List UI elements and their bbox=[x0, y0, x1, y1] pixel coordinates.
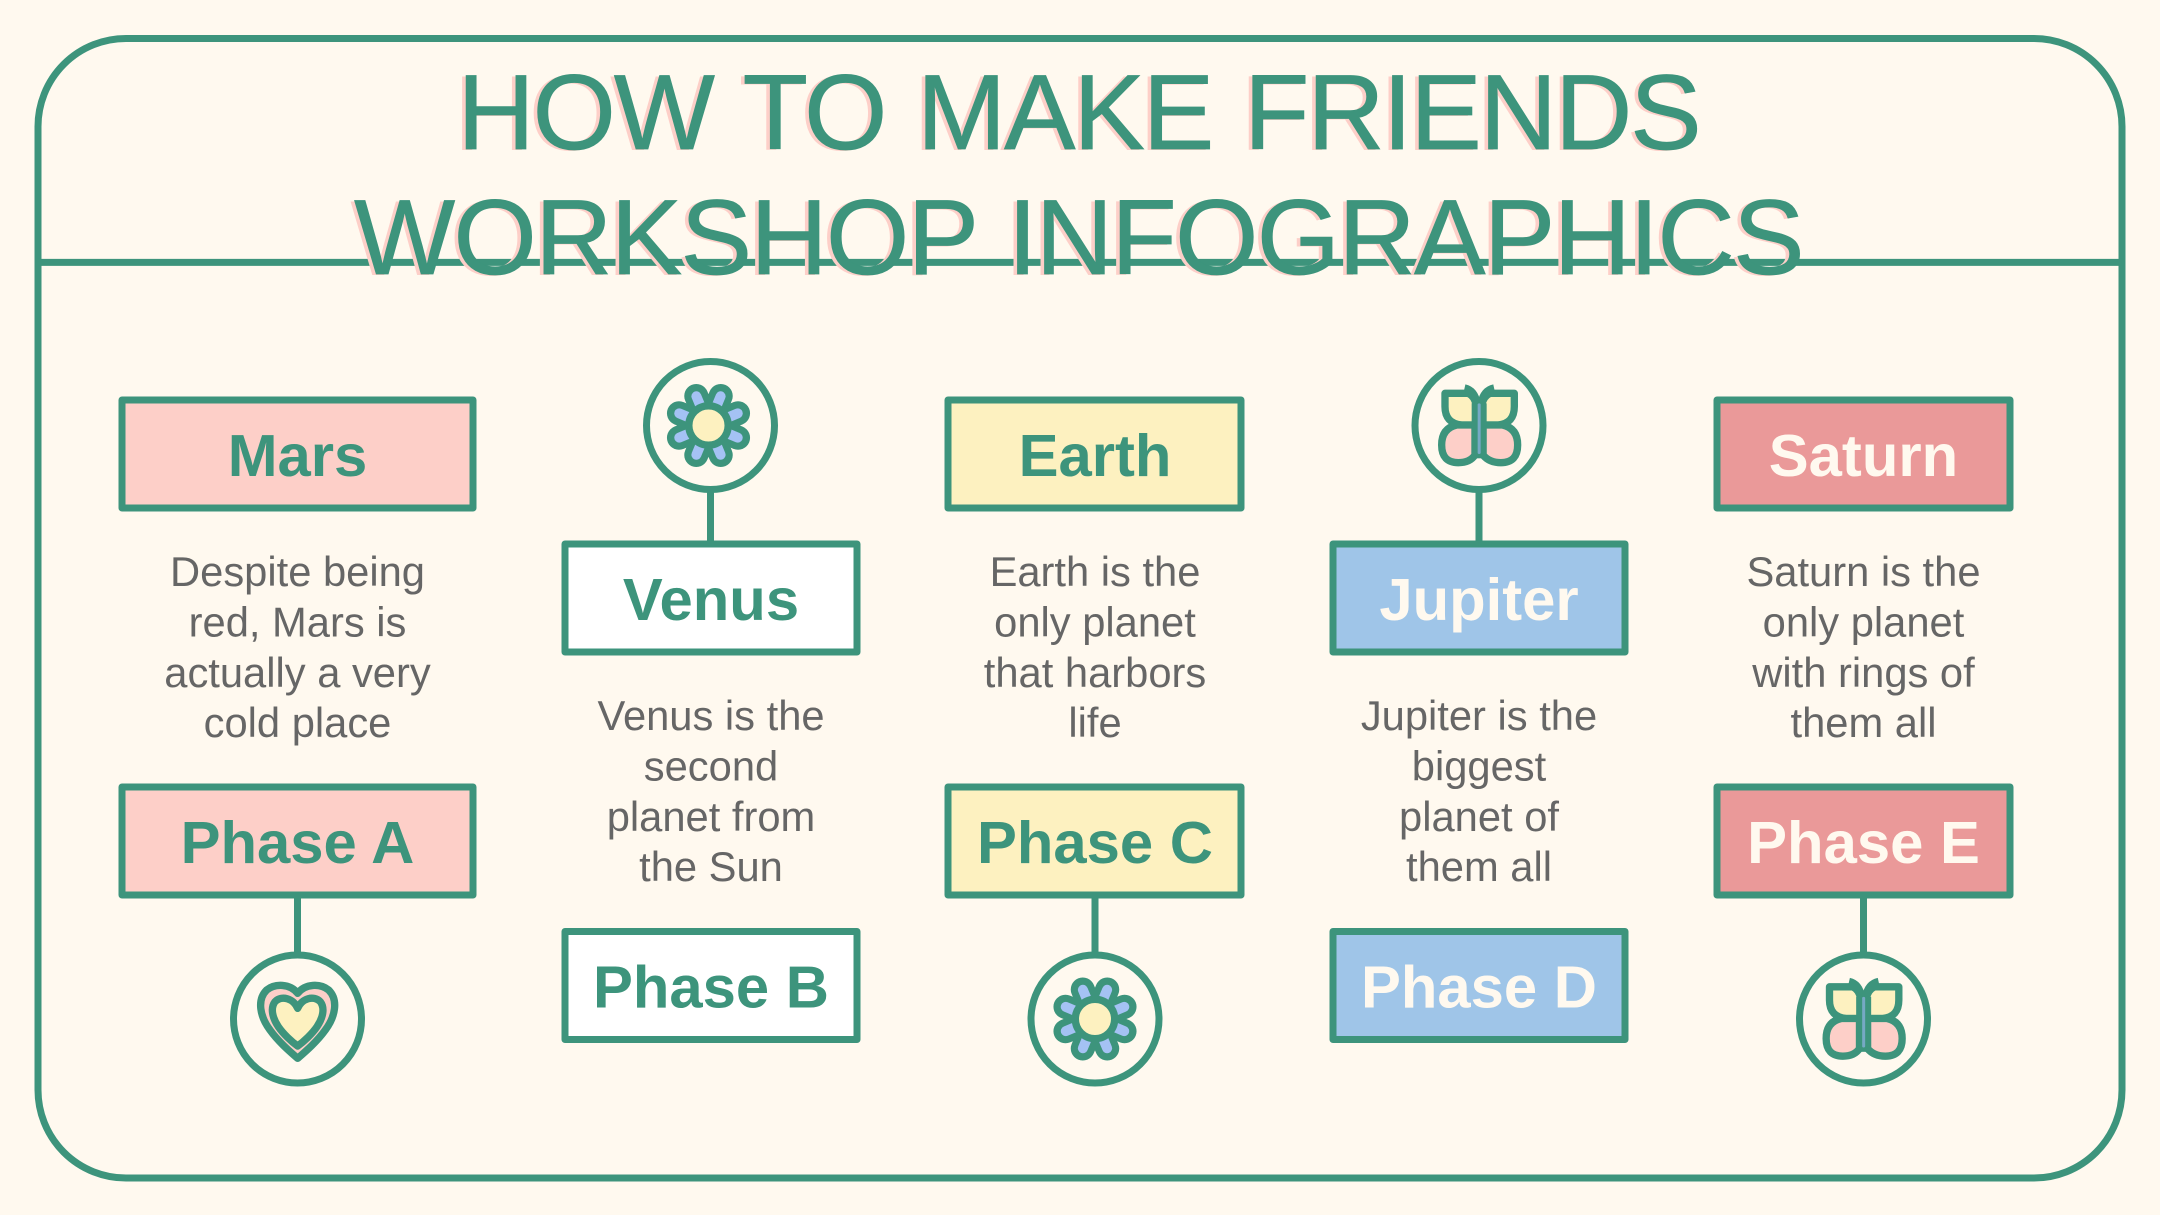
label: Saturn bbox=[1717, 400, 2010, 508]
label: Venus: Venus bbox=[623, 566, 799, 633]
header divider bbox=[38, 259, 2122, 266]
label: Jupiter: Jupiter bbox=[1379, 566, 1579, 633]
label: Jupiter bbox=[1333, 544, 1625, 652]
label: Earth: Earth bbox=[1019, 422, 1171, 489]
label: Phase B: Phase B bbox=[593, 954, 829, 1020]
icon: flower bbox=[646, 362, 774, 490]
text: Saturn description: with rings of bbox=[1751, 649, 1975, 696]
text: Jupiter description: Jupiter is the bbox=[1361, 692, 1597, 739]
text: Mars description bbox=[164, 548, 431, 746]
text: Jupiter description: planet of bbox=[1399, 793, 1559, 840]
label: Saturn: Saturn bbox=[1769, 422, 1958, 489]
text: Saturn description: them all bbox=[1791, 699, 1936, 746]
text: Jupiter description: biggest bbox=[1412, 742, 1547, 789]
connector: Phase E to butterfly icon bbox=[1860, 898, 1867, 955]
icon: flower bbox=[1031, 955, 1159, 1083]
text: Jupiter description bbox=[1361, 692, 1597, 890]
text: Venus description: Venus is the bbox=[597, 692, 825, 739]
label: Earth bbox=[948, 400, 1241, 508]
label: Mars: Mars bbox=[228, 422, 367, 489]
label: Phase D bbox=[1333, 932, 1625, 1040]
text: Saturn description: only planet bbox=[1763, 598, 1965, 645]
text: Earth description: that harbors bbox=[984, 649, 1206, 696]
text: Saturn description bbox=[1746, 548, 1981, 746]
icon: heart bbox=[234, 955, 362, 1083]
column: Venus bbox=[565, 362, 857, 1040]
text: Venus description: the Sun bbox=[639, 843, 783, 890]
label: Phase A bbox=[122, 787, 473, 895]
text: Saturn description: Saturn is the bbox=[1746, 548, 1981, 595]
column: Mars bbox=[122, 400, 473, 1083]
title bbox=[350, 52, 1803, 297]
label: Phase A: Phase A bbox=[181, 809, 414, 876]
label: Mars bbox=[122, 400, 473, 508]
text: Venus description: planet from bbox=[607, 793, 815, 840]
text: Mars description: Despite being bbox=[170, 548, 425, 595]
text: Earth description: only planet bbox=[994, 598, 1196, 645]
label: Phase C bbox=[948, 787, 1241, 895]
text: Jupiter description: them all bbox=[1406, 843, 1552, 890]
connector: butterfly icon to Jupiter bbox=[1476, 489, 1482, 541]
title: HOW TO MAKE FRIENDS bbox=[457, 52, 1700, 172]
text: Mars description: actually a very bbox=[164, 649, 431, 696]
column: Earth bbox=[948, 400, 1241, 1083]
connector: flower icon to Venus bbox=[707, 489, 714, 541]
label: Phase C: Phase C bbox=[977, 809, 1213, 876]
text: Mars description: red, Mars is bbox=[189, 598, 406, 645]
column: Saturn bbox=[1717, 400, 2010, 1083]
connector: Phase C to flower icon bbox=[1092, 898, 1098, 955]
connector: Phase A to heart icon bbox=[294, 898, 301, 955]
text: Earth description bbox=[984, 548, 1206, 746]
title: WORKSHOP INFOGRAPHICS bbox=[354, 177, 1803, 297]
text: Venus description bbox=[597, 692, 825, 890]
icon: butterfly bbox=[1800, 955, 1928, 1083]
text: Venus description: second bbox=[644, 742, 778, 789]
label: Phase B bbox=[565, 932, 857, 1040]
label: Venus bbox=[565, 544, 857, 652]
label: Phase E: Phase E bbox=[1747, 809, 1980, 876]
icon: butterfly bbox=[1415, 362, 1543, 490]
label: Phase D: Phase D bbox=[1361, 954, 1597, 1020]
text: Earth description: life bbox=[1068, 699, 1122, 746]
text: Earth description: Earth is the bbox=[990, 548, 1200, 595]
column: Jupiter bbox=[1333, 362, 1625, 1040]
label: Phase E bbox=[1717, 787, 2010, 895]
text: Mars description: cold place bbox=[204, 699, 391, 746]
